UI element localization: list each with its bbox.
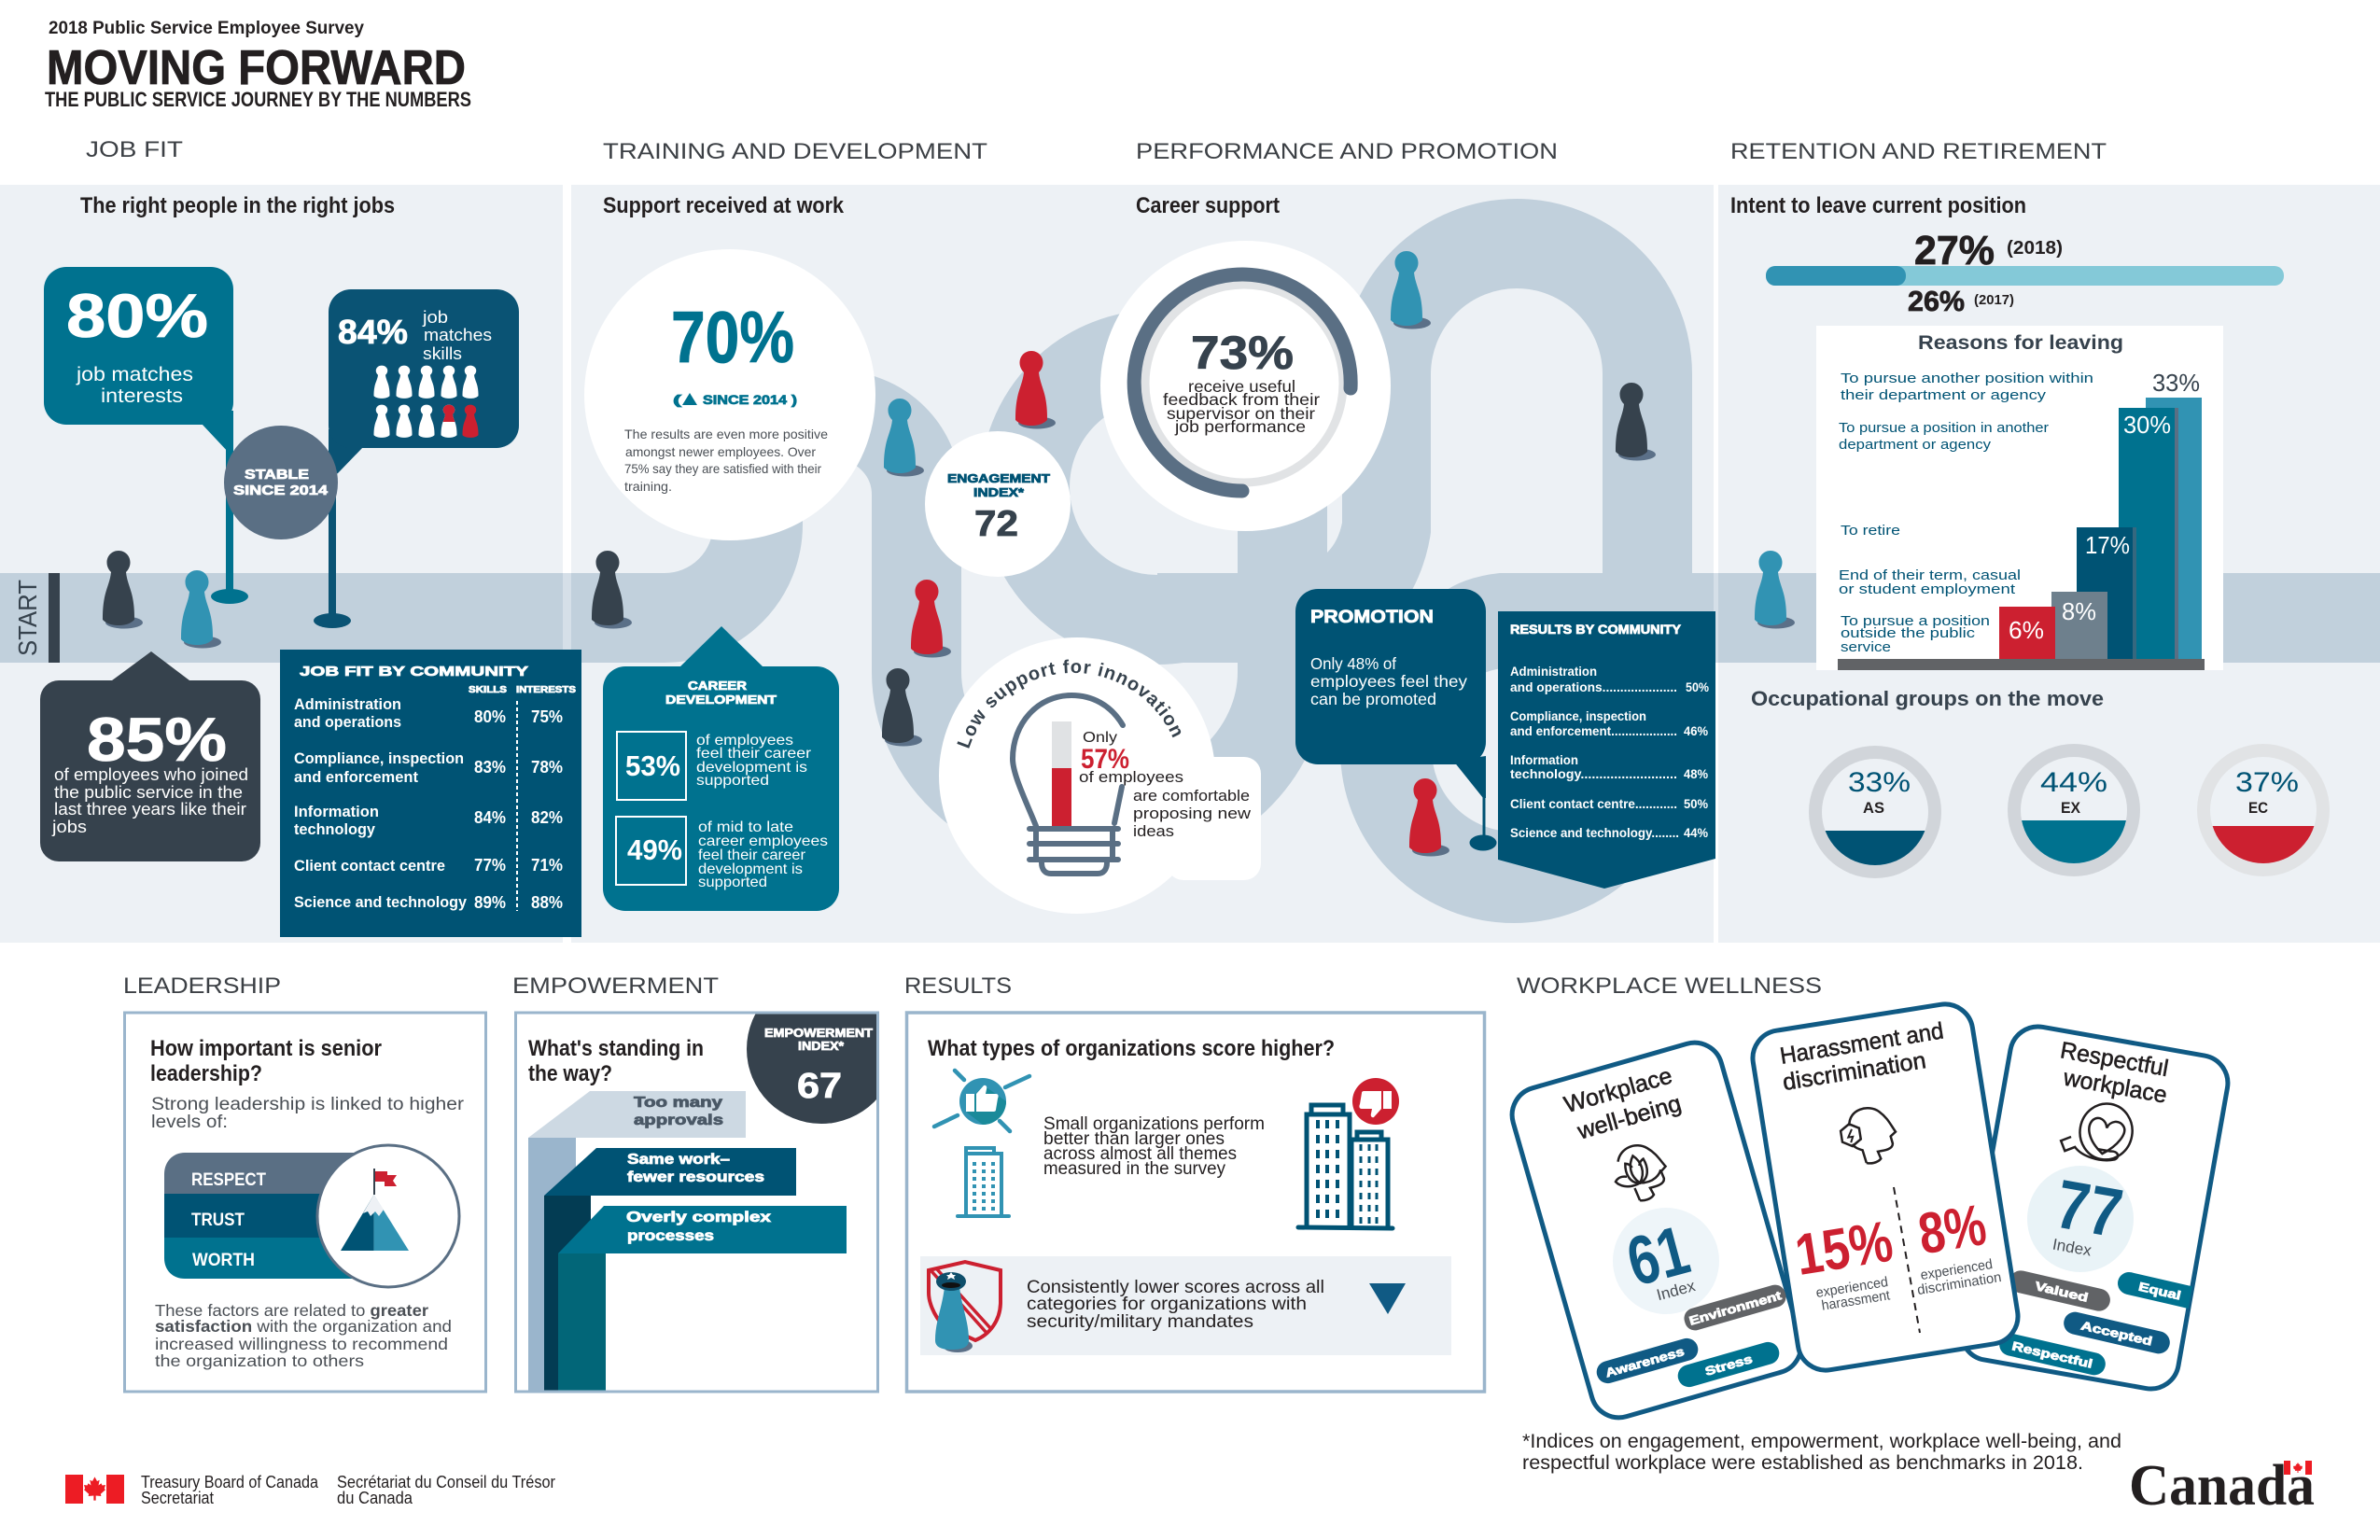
bar chart: reasons for leaving: To pursue a position in another — [1839, 421, 2049, 436]
gauge: AS 33% — [1809, 746, 1941, 878]
bar chart: reasons for leaving: To pursue a position — [1841, 614, 1990, 629]
callout: career development: feel their career — [696, 746, 812, 762]
table: job fit by community: 75% — [531, 707, 563, 726]
callout: career development: development is — [696, 760, 807, 776]
question: How important is senior — [150, 1036, 382, 1061]
respect trust worth bands — [164, 1153, 392, 1279]
circle: engagement index: 72 — [974, 504, 1018, 544]
step: too many approvals: approvals — [634, 1113, 723, 1128]
bar chart: reasons for leaving: service — [1841, 640, 1891, 655]
bar chart: reasons for leaving: 33% — [2152, 369, 2200, 397]
card: workplace well-being — [1505, 1036, 1808, 1424]
panel: empowerment — [512, 973, 896, 1393]
question: leadership? — [150, 1061, 262, 1086]
circle: low support for innovation: ideas — [1133, 822, 1174, 840]
row: security and military mandates — [920, 1256, 1451, 1355]
card: respectful workplace: Index — [2051, 1236, 2093, 1260]
tag: respectful: Respectful — [2010, 1338, 2093, 1371]
badge: empowerment index: INDEX* — [798, 1039, 845, 1053]
table: job fit by community: INTERESTS — [516, 684, 576, 695]
icon: head with lotus — [1608, 1139, 1673, 1206]
card: harassment and discrimination: discrimination — [1781, 1047, 1927, 1096]
callout: career development: DEVELOPMENT — [665, 693, 777, 707]
row: security and military mandates: Consistently lower scores across all — [1027, 1278, 1324, 1297]
table: results by community — [1498, 611, 1715, 889]
table: results by community: 44% — [1684, 825, 1709, 840]
text: small organizations — [1043, 1114, 1265, 1179]
progress bar: intent to leave — [1766, 228, 2284, 317]
icon: down triangle — [1369, 1283, 1406, 1314]
pawn: dark — [103, 551, 143, 629]
start marker — [13, 573, 60, 663]
bar chart: reasons for leaving: To pursue another position within — [1841, 371, 2093, 386]
subheading: Career support — [1136, 193, 1280, 218]
badge: stable since 2014: STABLE — [245, 467, 309, 483]
progress bar: intent to leave: (2017) — [1974, 292, 2014, 308]
icon: small building — [958, 1148, 1009, 1216]
circle: 70% support: ) — [791, 392, 797, 407]
card frame — [515, 1013, 877, 1392]
question — [150, 1036, 382, 1086]
tag: valued: Valued — [2034, 1279, 2090, 1305]
card: respectful workplace: workplace — [2061, 1064, 2169, 1109]
table: results by community: Science and technology........ — [1510, 825, 1679, 840]
table: results by community: Compliance, inspection — [1510, 708, 1646, 723]
circle: low support for innovation: of employees — [1079, 768, 1183, 786]
icon: light bulb with gauge — [1013, 695, 1123, 874]
bar chart: reasons for leaving: 6% — [2009, 616, 2044, 644]
callout: 85% like their jobs: jobs — [51, 817, 87, 836]
icon: thumbs down — [1352, 1078, 1399, 1125]
bar chart: reasons for leaving: End of their term, casual — [1839, 568, 2021, 583]
panel: performance and promotion — [1100, 139, 1715, 889]
table: results by community: 50% — [1684, 796, 1709, 811]
icon: large buildings — [1298, 1105, 1393, 1229]
subheading: Intent to leave current position — [1730, 193, 2026, 218]
callout: career development — [603, 626, 839, 911]
callout: career development: feel their career — [698, 847, 806, 863]
main title: MOVING FORWARD — [47, 41, 466, 95]
callout: career development: supported — [696, 773, 769, 789]
table: job fit by community: Information — [294, 803, 379, 820]
heading: workplace wellness: WORKPLACE WELLNESS — [1517, 973, 1822, 999]
footer: canada wordmark: Canada — [2129, 1454, 2315, 1518]
pawn: blue — [1391, 251, 1431, 329]
heading: retention and retirement: RETENTION AND RETIREMENT — [1730, 139, 2107, 164]
closing text — [155, 1301, 452, 1370]
subheading: The right people in the right jobs — [80, 193, 395, 218]
panel: training and development — [584, 139, 1299, 914]
step: same work fewer resources: Same work– — [627, 1152, 730, 1168]
step: overly complex processes — [558, 1206, 847, 1393]
icon: heart in hand — [2059, 1097, 2136, 1165]
gauge: EC 37%: EC — [2248, 799, 2268, 817]
bar chart: reasons for leaving: 30% — [2123, 411, 2171, 439]
subheading: occupational groups: Occupational groups on the move — [1751, 687, 2104, 710]
callout: career development: of employees — [696, 733, 793, 749]
circle: low support for innovation: Low support for innovation — [957, 659, 1182, 749]
bar chart: reasons for leaving: Reasons for leaving — [1918, 332, 2123, 354]
progress bar: intent to leave: 26% — [1908, 285, 1965, 317]
step: too many approvals: Too many — [634, 1095, 722, 1111]
circle: 70% support: The results are even more positive — [624, 427, 828, 441]
progress bar: intent to leave: (2018) — [2007, 238, 2063, 259]
icon: head with lightning — [1838, 1104, 1900, 1168]
card: respectful workplace: Respectful — [2058, 1037, 2170, 1082]
card: respectful workplace: 77 — [2051, 1165, 2128, 1253]
gauge: EX 44% — [2008, 744, 2140, 876]
table: results by community: Information — [1510, 752, 1578, 767]
card: workplace well-being: Index — [1655, 1277, 1698, 1304]
table: job fit by community: 77% — [474, 856, 506, 875]
footer: treasury board signature — [65, 1473, 555, 1507]
text: small organizations: measured in the survey — [1043, 1159, 1225, 1179]
bar chart: reasons for leaving: 8% — [2062, 597, 2096, 625]
circle: engagement index — [925, 431, 1071, 577]
step: overly complex processes: processes — [627, 1228, 714, 1244]
circle: 73% useful feedback: job performance — [1174, 417, 1306, 436]
gauge: EC 37%: 37% — [2235, 767, 2299, 798]
callout: 80% job matches interests: 80% — [66, 281, 208, 350]
closing text: satisfaction with the organization and — [155, 1317, 452, 1336]
panel: job fit — [13, 137, 581, 937]
gauge: EX 44%: 44% — [2040, 767, 2107, 798]
table: job fit by community: 89% — [474, 893, 506, 912]
footnote: respectful workplace were established as benchmarks in 2018. — [1522, 1452, 2083, 1474]
circle: engagement index: INDEX* — [973, 485, 1025, 499]
intro text: Strong leadership is linked to higher — [151, 1095, 465, 1114]
callout: 85% like their jobs: last three years like their — [54, 799, 246, 819]
table: job fit by community: 82% — [531, 808, 563, 827]
footer: treasury board signature: du Canada — [337, 1489, 413, 1507]
circle: 70% support: ( — [673, 392, 682, 407]
start marker: START — [13, 580, 42, 656]
tag: environment: Environment — [1687, 1288, 1784, 1328]
table: results by community: RESULTS BY COMMUNITY — [1510, 622, 1682, 637]
heading: job fit: JOB FIT — [86, 137, 183, 162]
callout: 80% job matches interests: interests — [101, 385, 183, 407]
callout: promotion: can be promoted — [1310, 690, 1436, 708]
callout: 85% like their jobs: 85% — [87, 705, 227, 774]
callout: 85% like their jobs — [40, 651, 260, 861]
heading: performance and promotion: PERFORMANCE AND PROMOTION — [1136, 139, 1558, 164]
closing text: These factors are related to greater — [155, 1301, 428, 1320]
survey label: 2018 Public Service Employee Survey — [49, 19, 364, 38]
table: job fit by community: 78% — [531, 758, 563, 777]
closing text: increased willingness to recommend — [155, 1335, 448, 1353]
table: job fit by community: 71% — [531, 856, 563, 875]
circle: 70% support: amongst newer employees. Over — [625, 444, 816, 459]
table: results by community: 50% — [1686, 679, 1709, 694]
table: job fit by community: Science and technology — [294, 893, 468, 911]
icon: thumbs up — [934, 1071, 1029, 1131]
callout: 84% job matches skills: matches — [424, 326, 492, 344]
circle: low support for innovation: 57% — [1081, 744, 1129, 775]
circle: 73% useful feedback: feedback from their — [1163, 390, 1320, 409]
gauge: AS 33%: 33% — [1848, 767, 1911, 798]
panel: retention and retirement — [1730, 139, 2330, 878]
card: harassment and discrimination: harassment — [1820, 1287, 1892, 1314]
card: harassment and discrimination: discrimination — [1916, 1269, 2003, 1298]
callout: career development: development is — [698, 861, 803, 877]
icon: mountain with flag — [317, 1145, 459, 1287]
badge: stable since 2014: SINCE 2014 — [233, 483, 329, 498]
panel: workplace wellness — [1505, 973, 2233, 1474]
circle: 70% support: SINCE 2014 — [703, 392, 787, 407]
tag: respectful — [1997, 1331, 2107, 1378]
gauge: EC 37% — [2197, 744, 2330, 876]
text: small organizations: Small organizations perform — [1043, 1114, 1265, 1134]
table: job fit by community: 84% — [474, 808, 506, 827]
callout: promotion: employees feel they — [1310, 672, 1467, 691]
tag: equal: Equal — [2137, 1280, 2182, 1303]
table: job fit by community: Administration — [294, 695, 401, 713]
circle: 70% support: training. — [624, 479, 672, 494]
pawn: blue — [1755, 551, 1795, 629]
tag: accepted: Accepted — [2079, 1318, 2154, 1349]
circle: 73% useful feedback: 73% — [1191, 327, 1294, 379]
callout: career development: career employees — [698, 833, 828, 849]
tag: stress: Stress — [1703, 1351, 1754, 1379]
bar chart: reasons for leaving: 17% — [2085, 531, 2130, 559]
card: harassment and discrimination: 15% — [1791, 1210, 1897, 1288]
intro text: levels of: — [151, 1113, 228, 1132]
question — [528, 1036, 704, 1086]
bar chart: reasons for leaving — [1816, 326, 2223, 670]
row: security and military mandates: categories for organizations with — [1027, 1295, 1307, 1314]
pawn: dark — [592, 551, 632, 629]
table: job fit by community: 83% — [474, 758, 506, 777]
footer: treasury board signature: Secrétariat du Conseil du Trésor — [337, 1473, 555, 1491]
footer: treasury board signature: Secretariat — [141, 1489, 214, 1507]
question: What's standing in — [528, 1036, 704, 1061]
pawn: red — [1015, 351, 1056, 429]
callout: 84% job matches skills: 84% — [338, 313, 408, 351]
tag: awareness — [1594, 1336, 1701, 1386]
heading: training and development: TRAINING AND DEVELOPMENT — [603, 139, 987, 164]
panel: results — [904, 973, 1484, 1392]
respect trust worth bands: RESPECT — [191, 1170, 266, 1190]
table: job fit by community: 88% — [531, 893, 563, 912]
callout: career development: 49% — [627, 833, 682, 866]
footer: treasury board signature: Treasury Board of Canada — [141, 1473, 319, 1491]
circle: 70% support — [584, 249, 875, 540]
intro text — [151, 1095, 465, 1132]
text: small organizations: across almost all themes — [1043, 1144, 1237, 1164]
header — [45, 19, 471, 111]
circle: low support for innovation — [939, 637, 1261, 914]
respect trust worth bands: WORTH — [192, 1251, 255, 1270]
pawn: dark — [1616, 383, 1656, 461]
table: results by community: 46% — [1684, 723, 1709, 738]
panel: leadership — [123, 973, 485, 1392]
card: harassment and discrimination: 8% — [1914, 1193, 1991, 1267]
step: same work fewer resources — [544, 1148, 796, 1393]
pawn: blue — [884, 399, 924, 476]
tag: valued — [2008, 1268, 2112, 1313]
card: harassment and discrimination — [1749, 1001, 2022, 1374]
question: the way? — [528, 1061, 612, 1086]
table: job fit by community: technology — [294, 820, 376, 838]
table: results by community: Administration — [1510, 664, 1597, 679]
circle: 73% useful feedback — [1100, 241, 1391, 531]
circle: low support for innovation: Only — [1083, 730, 1117, 746]
callout: 80% job matches interests: job matches — [76, 364, 193, 385]
table: results by community: technology.......................... — [1510, 766, 1677, 781]
step: overly complex processes: Overly complex — [626, 1210, 771, 1225]
gauge: AS 33%: AS — [1863, 799, 1884, 817]
tag: stress — [1675, 1339, 1782, 1390]
heading: empowerment: EMPOWERMENT — [512, 973, 719, 999]
callout: career development: supported — [698, 875, 767, 890]
card: workplace well-being: well-being — [1574, 1090, 1684, 1145]
tag: environment — [1682, 1282, 1788, 1333]
table: job fit by community: and operations — [294, 713, 401, 731]
step: same work fewer resources: fewer resources — [627, 1169, 764, 1185]
callout: 84% job matches skills: skills — [423, 344, 462, 363]
badge: empowerment index — [747, 1014, 876, 1124]
pawn: red — [911, 580, 951, 657]
circle: engagement index: ENGAGEMENT — [947, 471, 1050, 485]
pawn: dark — [882, 668, 922, 747]
heading: leadership: LEADERSHIP — [123, 973, 281, 999]
card: harassment and discrimination: Harassment and — [1778, 1017, 1945, 1070]
badge: empowerment index: EMPOWERMENT — [764, 1026, 873, 1040]
circle: 73% useful feedback: supervisor on their — [1167, 404, 1315, 423]
heading: results: RESULTS — [904, 973, 1012, 999]
table: job fit by community: SKILLS — [469, 684, 507, 695]
table: results by community: and operations..................... — [1510, 679, 1677, 694]
question: What types of organizations score higher? — [928, 1036, 1335, 1061]
icon: shield with officer pawn — [929, 1262, 1001, 1352]
subtitle: THE PUBLIC SERVICE JOURNEY BY THE NUMBERS — [45, 88, 471, 111]
callout: 80% job matches interests — [44, 267, 248, 604]
circle: 70% support: 70% — [671, 296, 794, 378]
badge: stable since 2014 — [224, 426, 338, 539]
subheading: Support received at work — [603, 193, 845, 218]
closing text: the organization to others — [155, 1351, 364, 1370]
tag: accepted — [2062, 1309, 2172, 1356]
card: harassment and discrimination: experienced — [1919, 1256, 1994, 1283]
callout: career development: of mid to late — [698, 819, 793, 835]
footnote: *Indices on engagement, empowerment, workplace well-being, and — [1522, 1431, 2121, 1452]
callout: career development: CAREER — [688, 679, 748, 693]
callout: 85% like their jobs: of employees who joined — [54, 764, 248, 784]
table: job fit by community: 80% — [474, 707, 506, 726]
card: workplace well-being: Workplace — [1561, 1062, 1675, 1118]
game path road — [0, 185, 2380, 943]
card: workplace well-being: 61 — [1619, 1211, 1697, 1301]
row: security and military mandates: security/military mandates — [1027, 1312, 1253, 1332]
respect trust worth bands: TRUST — [191, 1211, 245, 1230]
progress bar: intent to leave: 27% — [1914, 228, 1995, 273]
bar chart: reasons for leaving: department or agency — [1839, 438, 1992, 453]
icon: small flag — [2284, 1461, 2312, 1475]
callout: 85% like their jobs: the public service in the — [54, 782, 243, 802]
card: harassment and discrimination: experienced — [1814, 1274, 1889, 1301]
card background — [515, 1013, 877, 1392]
pawn: blue — [181, 570, 221, 648]
section backgrounds — [0, 185, 2380, 943]
callout: promotion: PROMOTION — [1310, 608, 1434, 627]
pawn: red — [1409, 778, 1449, 857]
bar chart: reasons for leaving: To retire — [1841, 524, 1900, 539]
table: job fit by community: JOB FIT BY COMMUNITY — [300, 664, 528, 679]
circle: 73% useful feedback: receive useful — [1188, 377, 1295, 396]
card frame — [125, 1013, 485, 1392]
table: results by community: 48% — [1684, 766, 1709, 781]
icon: canadian flag — [65, 1475, 124, 1504]
badge: empowerment index: 67 — [797, 1067, 842, 1106]
tag: awareness: Awareness — [1603, 1344, 1686, 1380]
callout: career development: 53% — [625, 749, 680, 782]
tag: equal — [2118, 1272, 2192, 1309]
circle: 70% support: 75% say they are satisfied with their — [624, 461, 821, 476]
table: results by community: and enforcement................... — [1510, 723, 1677, 738]
gauge: EX 44%: EX — [2061, 799, 2081, 817]
callout: promotion: Only 48% of — [1310, 654, 1396, 673]
card: respectful workplace — [1956, 1022, 2233, 1393]
step: too many approvals — [528, 1091, 746, 1393]
circle: low support for innovation: are comfortable — [1133, 787, 1250, 805]
table: job fit by community: Client contact centre — [294, 857, 445, 875]
callout: 84% job matches skills — [314, 289, 519, 628]
text: small organizations: better than larger ones — [1043, 1129, 1225, 1149]
bar chart: reasons for leaving: their department or agency — [1841, 388, 2047, 403]
bar chart: reasons for leaving: or student employment — [1839, 582, 2015, 597]
table: job fit by community: and enforcement — [294, 768, 418, 786]
bar chart: reasons for leaving: outside the public — [1841, 626, 1975, 641]
callout: 84% job matches skills: job — [422, 308, 448, 327]
card frame — [907, 1013, 1484, 1392]
footnote — [1522, 1431, 2121, 1474]
circle: low support for innovation: proposing new — [1133, 805, 1252, 822]
table: results by community: Client contact centre............ — [1510, 796, 1677, 811]
callout: promotion — [1295, 589, 1497, 851]
table: job fit by community — [280, 650, 581, 937]
table: job fit by community: Compliance, inspection — [294, 749, 464, 767]
